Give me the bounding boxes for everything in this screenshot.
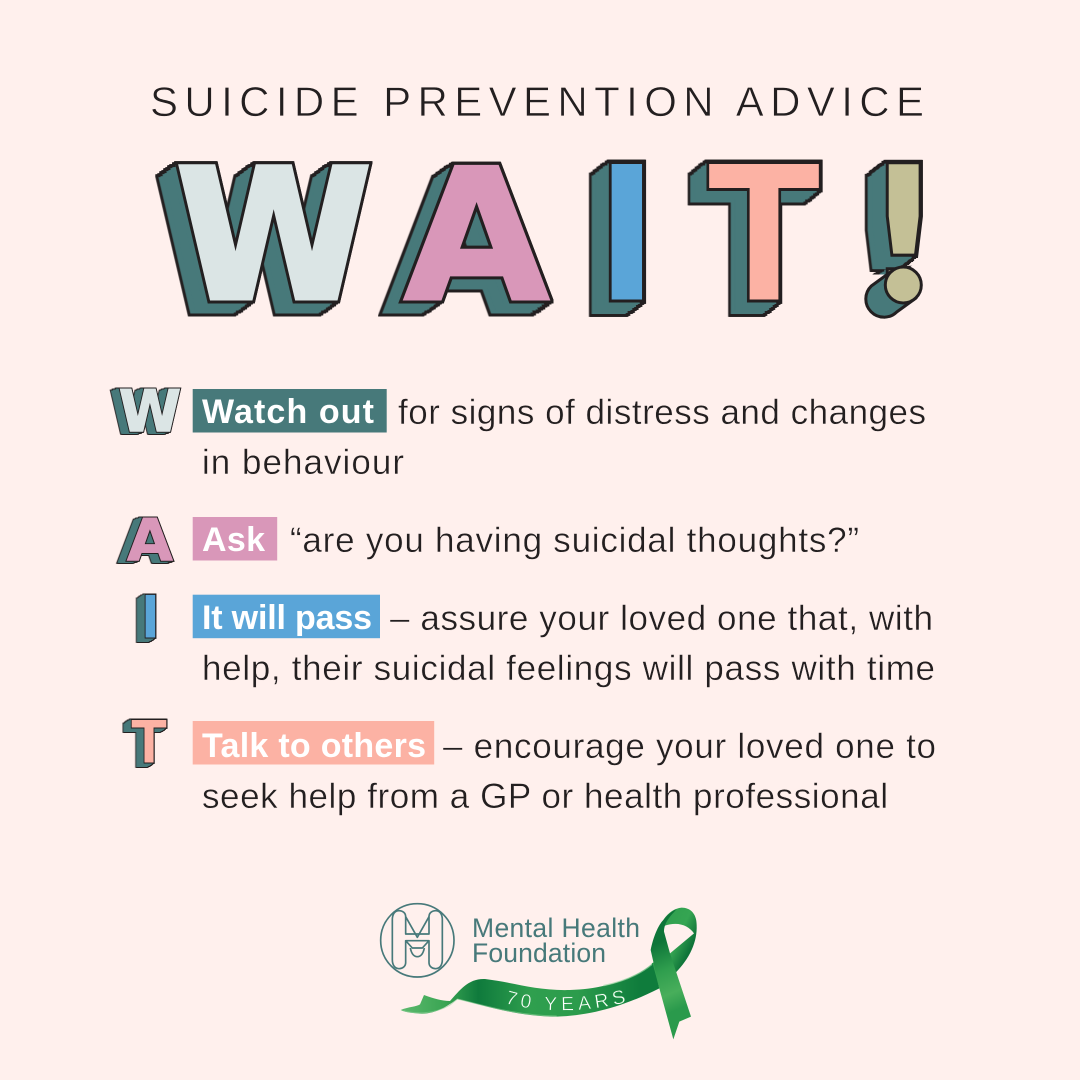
logo wordmark: Foundation: [472, 938, 606, 968]
logo wordmark: Mental Health: [472, 913, 640, 943]
highlight and text: talk to others: Talk to others: [202, 727, 426, 765]
icon: small letter A: A: [127, 507, 173, 574]
highlight and text: talk to others: [193, 721, 936, 816]
letter T: T: [707, 125, 821, 346]
letter I: I: [594, 125, 660, 346]
highlight and text: it will pass: [193, 595, 935, 688]
letter W: W: [176, 132, 371, 341]
highlight and text: watch out: Watch out: [202, 393, 374, 431]
icon: small letter T: T: [131, 708, 167, 778]
logo: Mental Health Foundation: [381, 904, 640, 977]
highlight and text: talk to others: – encourage your loved one to: [443, 727, 936, 766]
icon: small letter W: W: [119, 378, 181, 444]
highlight and text: talk to others: seek help from a GP or health professional: [202, 777, 888, 816]
exclamation stem: !: [861, 126, 946, 348]
green ribbon with 70 years: 70 YEARS: [508, 990, 625, 1010]
title: SUICIDE PREVENTION ADVICE: [150, 78, 924, 125]
highlight and text: it will pass: help, their suicidal feelings will pass with time: [202, 649, 935, 688]
highlight and text: watch out: in behaviour: [202, 443, 404, 482]
icon: small letter I: I: [140, 582, 160, 652]
highlight and text: ask: Ask: [202, 521, 265, 559]
highlight and text: watch out: for signs of distress and changes: [398, 393, 926, 432]
letter A: A: [404, 130, 549, 342]
highlight and text: ask: “are you having suicidal thoughts?”: [290, 521, 859, 560]
highlight and text: watch out: [193, 389, 926, 482]
icon: MH monogram: [381, 904, 454, 977]
exclamation dot: [864, 266, 923, 319]
highlight and text: it will pass: It will pass: [202, 599, 372, 637]
logo wordmark: [472, 913, 640, 968]
headline lettering: WAIT!: [155, 125, 923, 346]
highlight and text: it will pass: – assure your loved one that, with: [390, 599, 933, 638]
green ribbon with 70 years: [400, 908, 697, 1040]
